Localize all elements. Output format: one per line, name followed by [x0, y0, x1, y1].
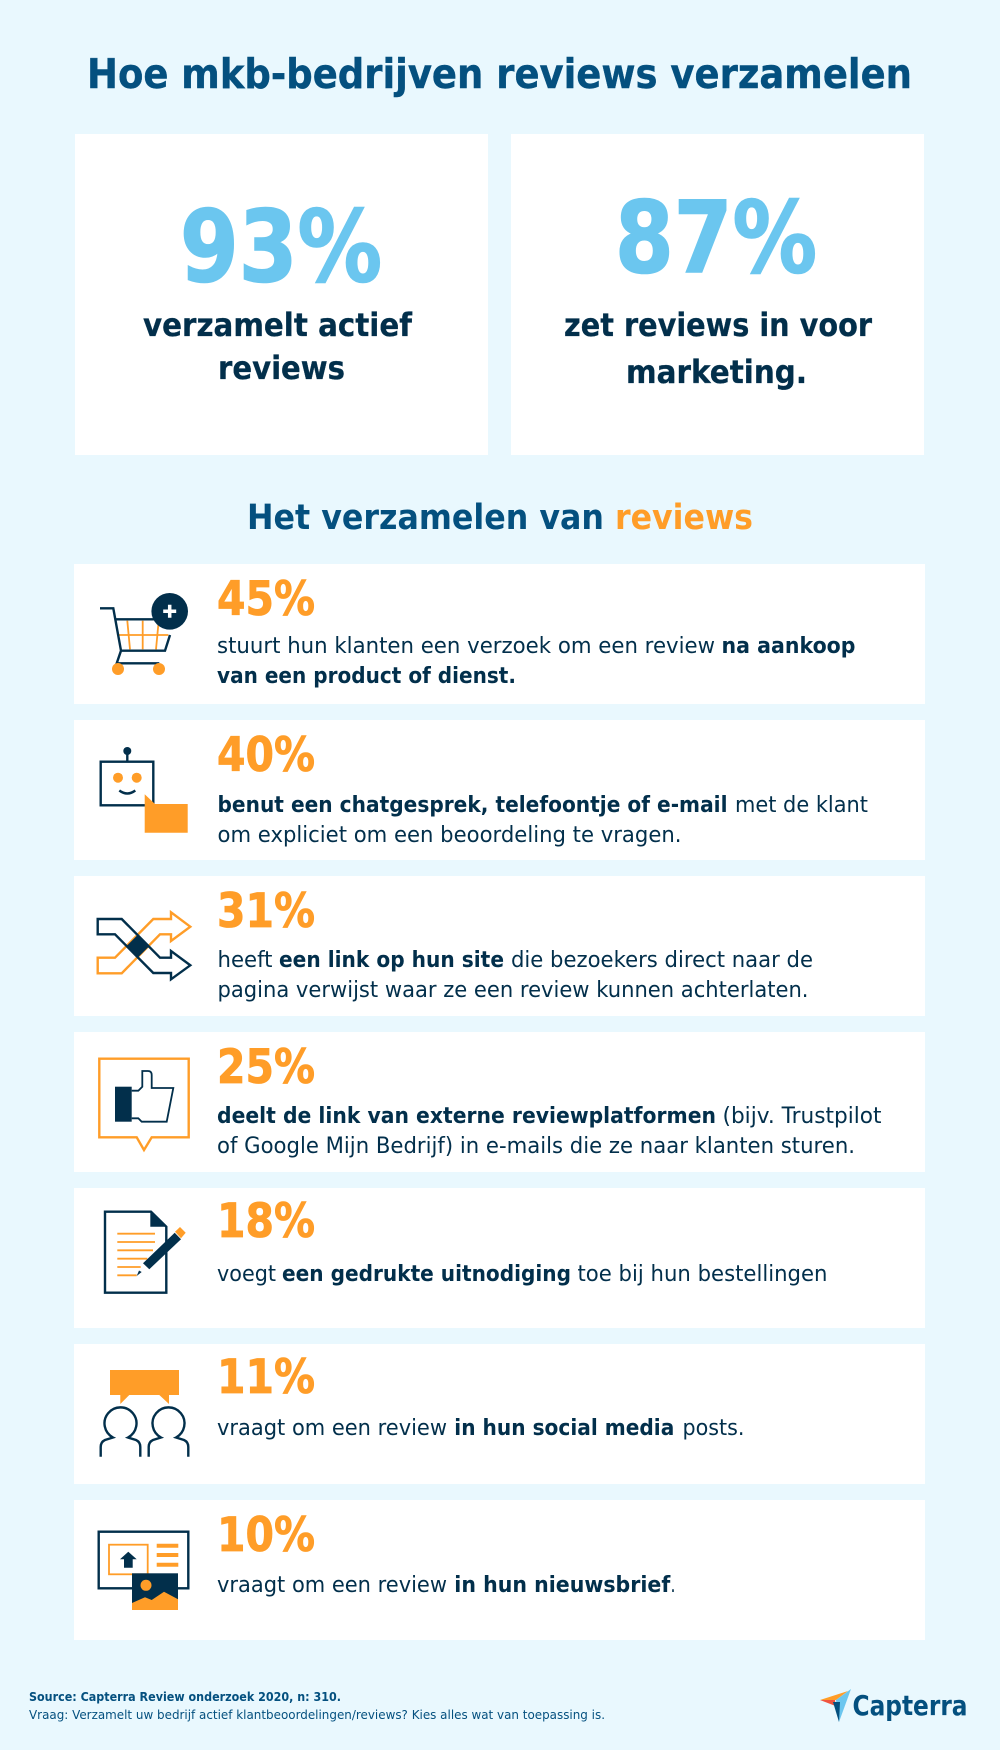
panel: row 45% — [74, 564, 925, 704]
description: na aankoop — [722, 633, 856, 659]
stat number 93%: 93% — [180, 190, 382, 305]
description: voegt — [217, 1261, 276, 1287]
stat number 87%: 87% — [615, 181, 817, 296]
panel: 93% stat — [75, 134, 488, 455]
source note: Vraag: Verzamelt uw bedrijf actief klantbeoordelingen/reviews? Kies alles wat van toepassing is. — [29, 1708, 605, 1722]
description: toe bij hun bestellingen — [578, 1261, 828, 1287]
description: een gedrukte uitnodiging — [282, 1261, 571, 1287]
title: Hoe mkb-bedrijven reviews verzamelen — [87, 50, 912, 98]
description — [217, 633, 856, 689]
description — [217, 1103, 882, 1159]
icon: two people with speech bubble — [101, 1370, 188, 1457]
percentage: 31% — [217, 884, 315, 939]
description — [218, 792, 868, 848]
source note: Source: Capterra Review onderzoek 2020, n: 310. — [29, 1690, 341, 1704]
stat caption: verzamelt actief — [143, 306, 413, 344]
panel: row 25% — [74, 1032, 925, 1172]
description: die bezoekers direct naar de — [511, 947, 813, 973]
panel: row 18% — [74, 1188, 925, 1328]
panel: row 10% — [74, 1500, 925, 1640]
stat caption: reviews — [218, 349, 345, 387]
description: (bijv. Trustpilot — [722, 1103, 882, 1129]
description — [217, 1415, 744, 1441]
description: of Google Mijn Bedrijf) in e-mails die ze naar klanten sturen. — [217, 1133, 855, 1159]
description: stuurt hun klanten een verzoek om een review — [217, 633, 715, 659]
icon: shopping cart — [100, 593, 188, 675]
description: vraagt om een review — [217, 1572, 447, 1598]
section heading: reviews — [615, 498, 753, 538]
description: in hun nieuwsbrief — [454, 1572, 670, 1598]
icon: newsletter screen with image — [99, 1532, 188, 1610]
description: deelt de link van externe reviewplatformen — [217, 1103, 716, 1129]
panel: 87% stat — [511, 134, 924, 455]
stat caption — [564, 306, 872, 391]
percentage: 40% — [217, 728, 315, 783]
source note — [29, 1690, 605, 1722]
description: heeft — [218, 947, 273, 973]
description — [218, 947, 813, 1003]
icon: chatbot — [101, 747, 188, 833]
panel: row 11% — [74, 1344, 925, 1484]
panel: row 31% — [74, 876, 925, 1016]
description: vraagt om een review — [217, 1415, 447, 1441]
panel: row 40% — [74, 720, 925, 860]
description: een link op hun site — [279, 947, 504, 973]
description — [217, 1572, 676, 1598]
description: met de klant — [735, 792, 868, 818]
description: pagina verwijst waar ze een review kunnen achterlaten. — [218, 977, 808, 1003]
stat caption — [143, 306, 413, 387]
percentage: 45% — [217, 572, 315, 627]
percentage: 18% — [217, 1194, 315, 1249]
description — [217, 1261, 828, 1287]
logo: Capterra: Capterra — [852, 1689, 968, 1722]
percentage: 11% — [217, 1350, 315, 1405]
section heading: Het verzamelen van — [247, 498, 604, 538]
icon: thumbs up in speech bubble — [99, 1059, 189, 1150]
description: om expliciet om een beoordeling te vragen. — [218, 822, 682, 848]
percentage: 10% — [217, 1508, 315, 1563]
description: in hun social media — [454, 1415, 674, 1441]
description: van een product of dienst. — [217, 663, 516, 689]
stat caption: marketing. — [626, 353, 807, 391]
stat caption: zet reviews in voor — [564, 306, 872, 344]
logo: Capterra — [820, 1689, 968, 1722]
description: . — [670, 1572, 676, 1598]
description: benut een chatgesprek, telefoontje of e-mail — [218, 792, 728, 818]
percentage: 25% — [217, 1040, 315, 1095]
icon: crossing arrows — [98, 912, 190, 979]
icon: document with pencil — [105, 1212, 186, 1293]
description: posts. — [682, 1415, 744, 1441]
